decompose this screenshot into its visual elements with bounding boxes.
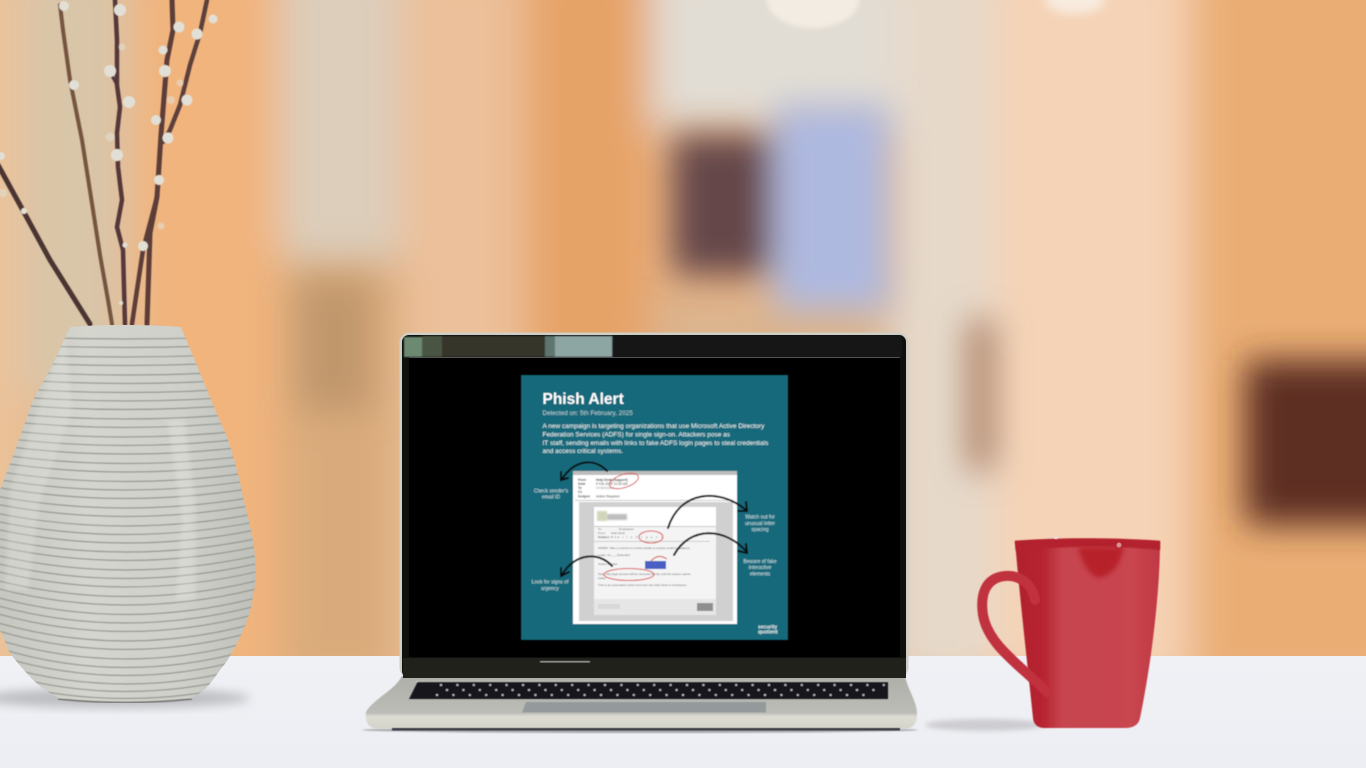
email header: Action Required — [596, 494, 620, 498]
callout labels: Watch out for — [745, 514, 775, 520]
email header: Sent — [578, 482, 586, 486]
email mockup: Rea l l y U r g e n t — [611, 535, 663, 539]
red mug — [925, 534, 1160, 731]
logo: quotient — [758, 630, 778, 636]
mug handle — [982, 576, 1047, 692]
callout labels: interactive — [749, 565, 772, 571]
screen reflection — [404, 336, 902, 357]
callout labels: elements — [750, 572, 771, 578]
email mockup: Subject: — [598, 535, 610, 539]
email mockup: Login: ref ___ Extended — [598, 553, 630, 557]
callout labels — [532, 488, 777, 592]
email mockup: Employees — [619, 527, 634, 531]
email header: Undisclosed — [596, 486, 614, 490]
detected date: Detected on: 5th February, 2025 — [542, 410, 633, 417]
laptop lid — [400, 332, 908, 678]
curved arrows — [561, 462, 747, 576]
email mockup: Action needed — [598, 562, 618, 566]
callout labels: Look for signs of — [532, 580, 569, 586]
keyboard — [409, 681, 888, 699]
description: Federation Services (ADFS) for single sign-on. Attackers pose as — [542, 432, 731, 438]
vase ribbing — [0, 336, 260, 698]
callout labels: email ID — [542, 494, 561, 500]
ceiling lamp — [767, 0, 859, 28]
infographic panel — [521, 375, 788, 640]
description — [542, 423, 769, 455]
email header: Help Desk (Support) — [596, 478, 628, 482]
branches with catkins — [0, 0, 218, 324]
email header: From — [578, 478, 586, 482]
email header: 5 Feb 2025 10:30 AM — [596, 482, 628, 486]
description: A new campaign is targeting organizations that use Microsoft Active Directory — [542, 423, 765, 430]
email header — [578, 478, 628, 498]
red annotation ellipses — [604, 470, 667, 580]
callout labels: spacing — [751, 527, 769, 533]
table surface — [0, 656, 1366, 768]
description: IT staff, sending emails with links to fake ADFS login pages to steal credentials — [542, 440, 769, 447]
callout labels: Beware of fake — [743, 559, 777, 565]
email mockup: This is an automated notice sent from the Help Desk to employees. — [598, 583, 687, 587]
email header: Subject — [578, 494, 591, 498]
email mockup: From: — [598, 531, 606, 535]
title: Phish Alert — [542, 391, 624, 408]
callout labels: Check sender's — [534, 488, 569, 494]
email mockup — [573, 470, 737, 624]
email header: To — [578, 486, 582, 490]
description: and access critical systems. — [542, 448, 623, 455]
email mockup: Note: this page access will be removed shortly until the system opens — [598, 572, 691, 576]
email mockup: ADMIN: Take a moment to review details to ensure email compliance. — [598, 546, 690, 550]
callout labels: urgency — [541, 586, 559, 592]
laptop — [362, 332, 918, 733]
callout labels: unusual letter — [745, 521, 775, 527]
vase highlights — [5, 335, 72, 590]
email mockup: Help Desk — [611, 531, 625, 535]
email header: Cc — [578, 490, 582, 494]
trackpad — [522, 702, 766, 712]
screen black area — [409, 358, 900, 657]
laptop base — [366, 676, 917, 729]
logo — [758, 624, 778, 636]
email body — [579, 502, 733, 621]
email mockup: To: — [598, 527, 602, 531]
vase — [0, 320, 265, 710]
logo: security — [758, 624, 777, 630]
fake button — [645, 561, 666, 569]
email mockup: today. — [598, 576, 606, 580]
mug body — [1015, 538, 1160, 728]
